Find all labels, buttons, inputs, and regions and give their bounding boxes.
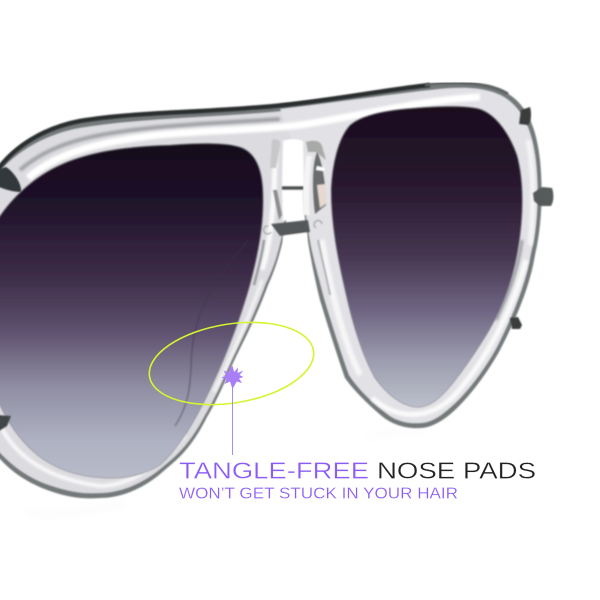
hinge stud: upper right [519, 107, 531, 125]
subheading: WON’T GET STUCK IN YOUR HAIR [179, 485, 458, 502]
hinge stud: lower left [0, 415, 11, 433]
heading: TANGLE-FREE [179, 458, 369, 484]
nose bridge glass details [254, 139, 330, 295]
heading: nose pads: NOSE PADS [377, 458, 536, 484]
frame top dark edge [0, 85, 430, 172]
left lens [0, 143, 263, 478]
frame highlights [0, 97, 533, 486]
icon: purple starburst [222, 366, 244, 389]
hinge stud: upper left [0, 167, 21, 192]
frame: left rim [0, 106, 300, 498]
callout leader line [232, 385, 234, 455]
hinge stud: lower right [510, 317, 522, 329]
sunglasses [0, 83, 553, 515]
bridge opening [271, 139, 310, 242]
frame top grey edge right [425, 83, 508, 94]
right lens [331, 106, 522, 407]
nose pad outline on lens [175, 240, 248, 426]
callout ellipse [143, 312, 320, 415]
hinge stud: middle right [533, 187, 553, 206]
faint reflections under the frame [25, 433, 425, 515]
frame: right rim [280, 83, 542, 428]
